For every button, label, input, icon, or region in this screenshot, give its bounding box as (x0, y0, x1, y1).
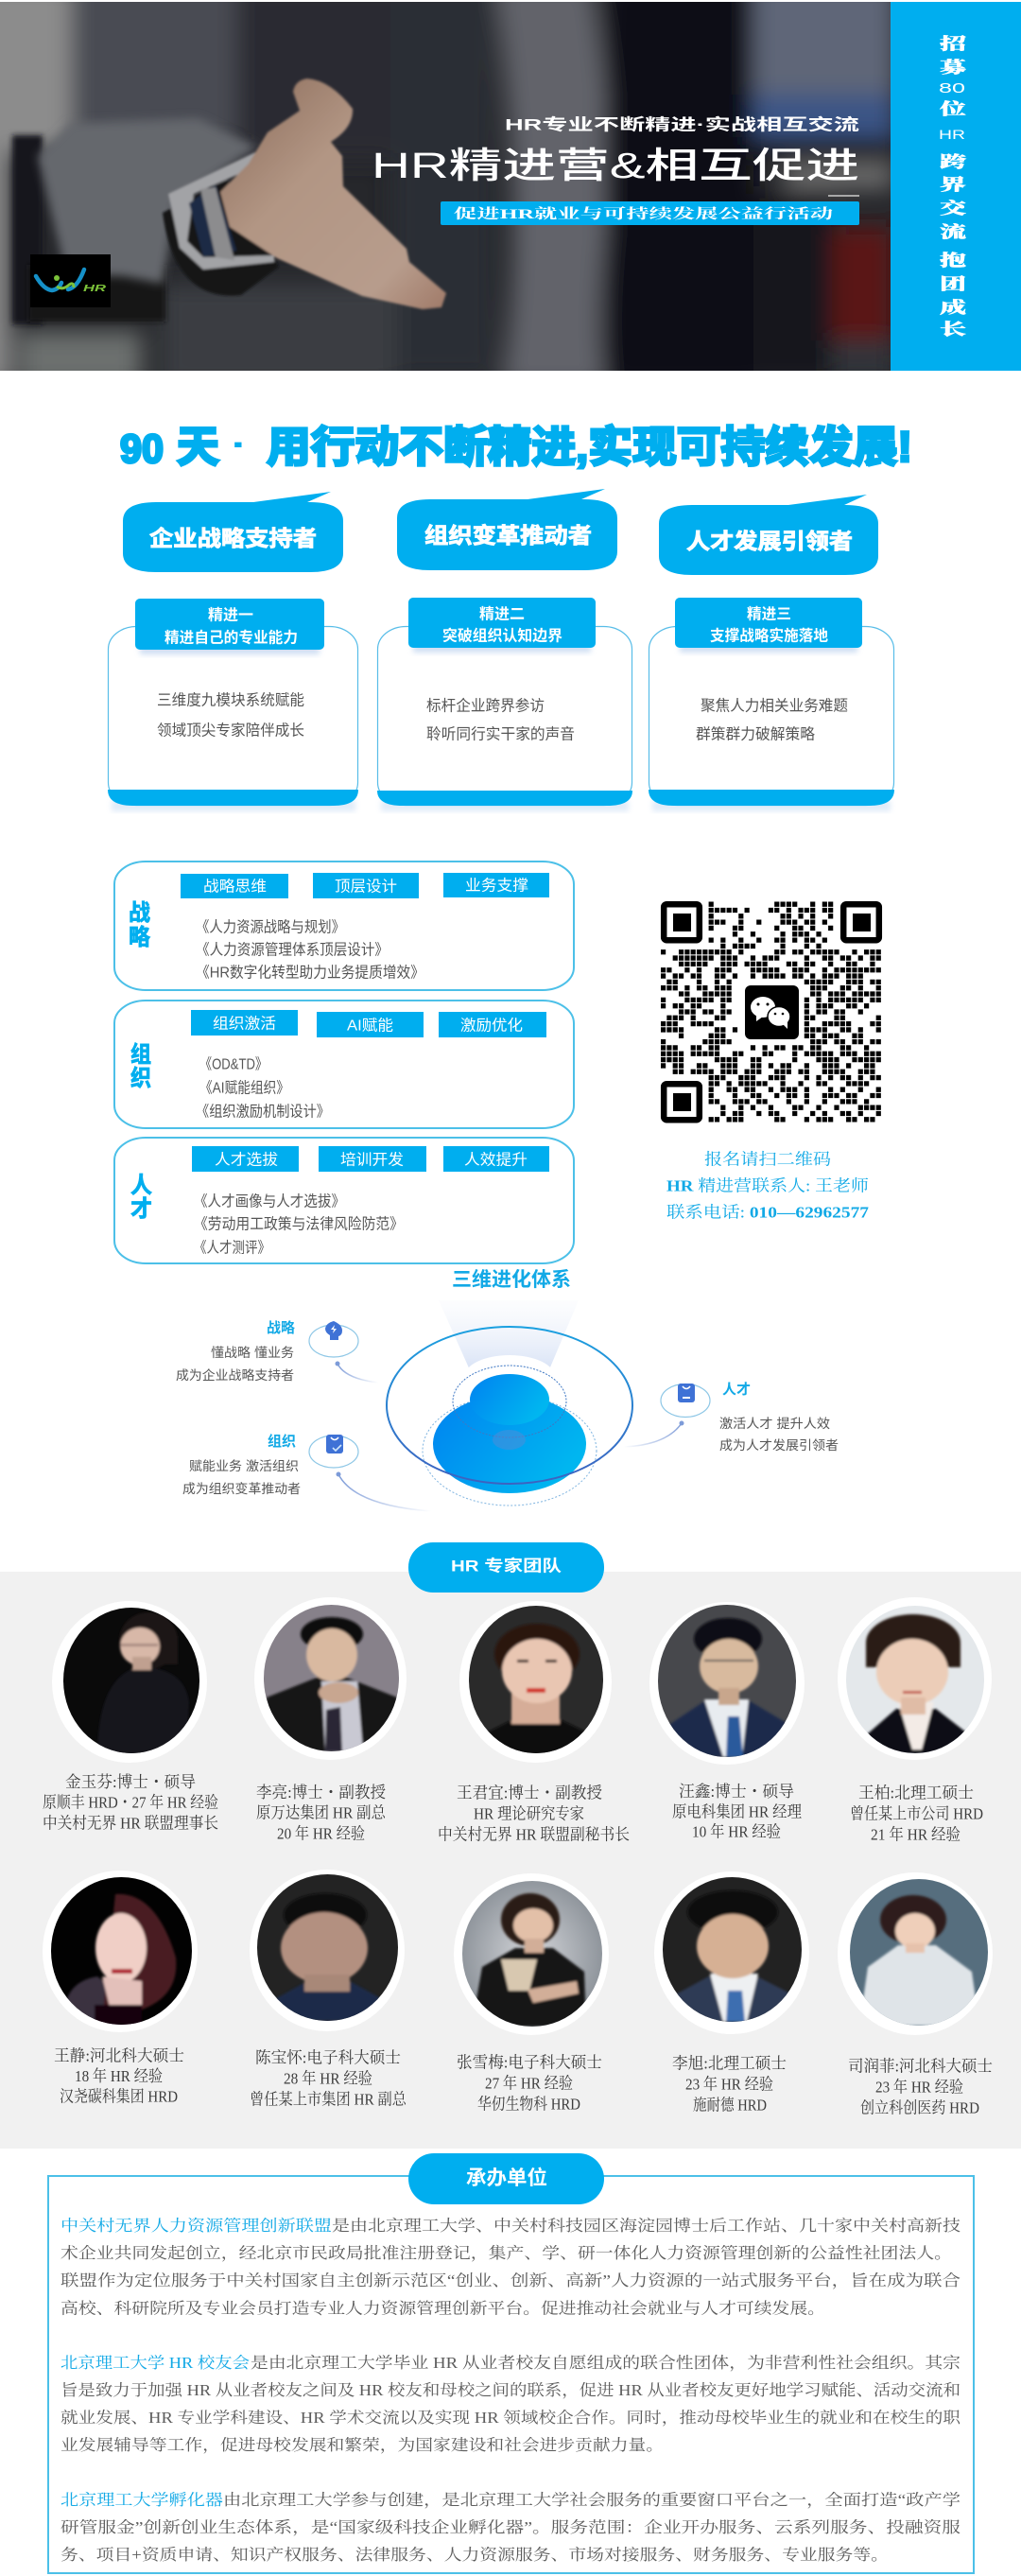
caption: 李亮:博士・副教授 (256, 1784, 386, 1801)
course list: 《人力资源管理体系顶层设计》 (196, 942, 389, 959)
caption: 王静:河北科大硕士 (54, 2046, 184, 2065)
hero banner (0, 0, 1021, 388)
tags: 顶层设计 (335, 878, 397, 895)
caption: 张雪梅:电子科大硕士 (457, 2054, 602, 2071)
card: advance three: 聚焦人力相关业务难题 (701, 698, 848, 715)
tags: 组织激活 (213, 1016, 276, 1033)
panel: host organisations (48, 2153, 974, 2573)
course list: 《人力资源战略与规划》 (196, 919, 345, 936)
vertical label (130, 1042, 151, 1091)
QR code (661, 904, 882, 1120)
tags: 激励优化 (460, 1018, 523, 1035)
speech bubble: enterprise strategy: 企业战略支持者 (149, 526, 317, 550)
icon: lightbulb head (325, 1321, 342, 1340)
caption (438, 1784, 630, 1844)
caption: 28 年 HR 经验 (284, 2069, 372, 2088)
caption: 中关村无界 HR 联盟副秘书长 (438, 1825, 630, 1844)
logo (30, 254, 111, 307)
paragraph: BIT incubator (61, 2491, 961, 2564)
portrait (63, 1608, 199, 1753)
tags: 培训开发 (340, 1152, 404, 1169)
caption: 10 年 HR 经验 (692, 1821, 781, 1840)
registration contact text: HR 精进营联系人: 王老师 (666, 1176, 869, 1195)
caption: 原万达集团 HR 副总 (256, 1804, 387, 1821)
recruitment side panel (891, 2, 1021, 371)
icon: badge with check (326, 1435, 343, 1453)
tags: AI赋能 (347, 1018, 393, 1035)
card: advance two (377, 598, 632, 811)
main heading: 用行动不断精进,实现可持续发展! (267, 423, 912, 471)
card: advance two: 聆听同行实干家的声音 (426, 726, 575, 743)
paragraph: Zhongguancun alliance (61, 2217, 961, 2317)
tags: 人才选拔 (215, 1152, 278, 1169)
portrait (264, 1605, 399, 1751)
caption: 23 年 HR 经验 (685, 2075, 773, 2094)
paragraph: BIT HR alumni association: 旨是致力于加强 HR 从业者校友之间及 HR 校友和母校之间的联系，促进 HR 从业者校友更好地学习赋能、活动交流和 (61, 2381, 960, 2399)
course list: 《OD&TD》 (199, 1057, 268, 1072)
paragraph: BIT incubator: 北京理工大学孵化器 (61, 2491, 224, 2509)
hero photo: handshake (0, 0, 895, 388)
caption: 王柏:北理工硕士 (858, 1784, 974, 1802)
expert: Li Xu (654, 1871, 809, 2115)
caption (54, 2046, 184, 2105)
registration contact text: 联系电话: 010—62962577 (666, 1203, 870, 1222)
paragraph: BIT HR alumni association: 就业发展、HR 专业学科建设、HR 学术交流以及实现 HR 领域校企合作。同时，推动母校毕业生的就业和在校生的职 (61, 2409, 961, 2427)
caption: 金玉芬:博士・硕导 (65, 1773, 196, 1791)
tab: 精进自己的专业能力 (164, 628, 298, 647)
callout: organisation: 赋能业务 激活组织 (189, 1459, 299, 1473)
callout: talent: 激活人才 提升人效 (719, 1417, 831, 1431)
paragraph: Zhongguancun alliance: 高校、科研院所及专业会员打造专业人力资源管理创新平台。促进推动社会就业与人才可续发展。 (61, 2300, 825, 2317)
tags (192, 1146, 549, 1172)
paragraph: Zhongguancun alliance: 是由北京理工大学、中关村科技园区海淀园博士后工作站、几十家中关村高新技 (332, 2217, 961, 2235)
caption (457, 2054, 602, 2113)
tab (135, 599, 324, 650)
card: advance one: 领域顶尖专家陪伴成长 (157, 722, 304, 740)
expert: Chen Baohuai (250, 1868, 407, 2109)
course list: 《劳动用工政策与法律风险防范》 (194, 1216, 404, 1233)
callout: strategy: 成为企业战略支持者 (176, 1367, 294, 1383)
main heading: 90 (120, 426, 164, 472)
tab: 突破组织认知边界 (442, 626, 562, 645)
hero subtitle: HR专业不断精进·实战相互交流 (505, 115, 859, 134)
tab: 精进一 (208, 605, 253, 624)
caption: 李旭:北理工硕士 (672, 2054, 787, 2073)
vertical label: 人 (130, 1173, 152, 1198)
vertical label: 才 (130, 1196, 152, 1222)
expert: Si Runfei (838, 1872, 997, 2116)
heading pill: HR expert team: HR 专家团队 (451, 1557, 562, 1575)
three-dimension diagram title: 三维进化体系 (452, 1269, 571, 1291)
heading pill: host units: 承办单位 (466, 2167, 547, 2189)
card: advance two: 标杆企业跨界参访 (426, 698, 545, 715)
recruitment side panel: 位 (940, 99, 966, 118)
expert: Wang Jing (43, 1871, 199, 2105)
vertical label: 略 (129, 925, 150, 950)
caption (672, 2054, 787, 2115)
speech bubble: organisation change: 组织变革推动者 (424, 523, 592, 548)
tab: 精进三 (747, 605, 791, 622)
recruitment side panel: 80 (939, 80, 965, 96)
expert: Jin Yufen (43, 1601, 218, 1833)
caption: 21 年 HR 经验 (871, 1825, 960, 1844)
icon: wechat (745, 985, 799, 1039)
caption: 23 年 HR 经验 (875, 2077, 963, 2096)
vertical label: 织 (130, 1066, 151, 1091)
recruitment side panel: 跨 (940, 153, 966, 171)
recruitment side panel: HR (939, 127, 965, 142)
hero tagline bar: 促进HR就业与可持续发展公益行活动 (454, 205, 834, 222)
icon: device (678, 1384, 695, 1402)
course list: 《HR数字化转型助力业务提质增效》 (196, 965, 424, 982)
hero title: HR精进营&相互促进 (372, 147, 859, 186)
callout: talent: 人才 (722, 1382, 751, 1398)
portrait (257, 1874, 398, 2021)
logo: HR (83, 284, 107, 294)
vertical label (129, 900, 150, 950)
recruitment side panel: 交 (940, 200, 968, 218)
caption: 18 年 HR 经验 (75, 2066, 163, 2085)
card: advance one: 三维度九模块系统赋能 (157, 692, 304, 709)
recruitment side panel: 流 (940, 222, 968, 241)
caption: 陈宝怀:电子科大硕士 (255, 2048, 401, 2067)
caption: 原顺丰 HRD・27 年 HR 经验 (43, 1793, 218, 1812)
caption (848, 2058, 993, 2116)
vertical label: 组 (130, 1042, 151, 1068)
registration contact text: 报名请扫二维码 (704, 1150, 831, 1169)
tags: 人效提升 (464, 1152, 528, 1169)
tab: 精进二 (479, 605, 525, 622)
heading pill: HR expert team (408, 1542, 604, 1593)
recruitment side panel: 抱 (940, 251, 966, 270)
caption: 创立科创医药 HRD (860, 2099, 979, 2116)
portrait (658, 1605, 796, 1757)
recruitment side panel: 长 (940, 320, 966, 339)
paragraph: BIT HR alumni association: 业发展辅导等工作，促进母校发展和繁荣，为国家建设和社会进步贡献力量。 (61, 2436, 664, 2454)
tags (181, 873, 549, 898)
speech bubble: talent development: 人才发展引领者 (686, 529, 853, 553)
paragraph: Zhongguancun alliance: 中关村无界人力资源管理创新联盟 (61, 2217, 332, 2235)
caption: 20 年 HR 经验 (277, 1823, 365, 1842)
expert: Li Liang (254, 1597, 407, 1842)
caption: 汉尧碳科集团 HRD (60, 2088, 178, 2105)
card: advance three: 群策群力破解策略 (696, 726, 815, 743)
recruitment side panel: 招 (940, 34, 966, 53)
paragraph: BIT HR alumni association (61, 2354, 961, 2454)
heading pill: host units (408, 2153, 604, 2204)
caption (256, 1784, 387, 1842)
registration contact text (666, 1150, 870, 1222)
caption: 曾任某上市公司 HRD (850, 1804, 983, 1823)
speech bubble: enterprise strategy (123, 492, 343, 572)
tags: 业务支撑 (465, 878, 528, 895)
course list: 《人才测评》 (194, 1239, 270, 1256)
caption (43, 1773, 218, 1833)
speech bubble: talent development (659, 495, 878, 575)
panel: strategy (114, 862, 574, 990)
portrait (846, 1606, 984, 1753)
paragraph: BIT HR alumni association: 是由北京理工大学毕业 HR 从业者校友自愿组成的联合性团体，为非营利性社会组织。其宗 (251, 2354, 961, 2372)
course list: 《AI赋能组织》 (199, 1080, 289, 1097)
callout: talent: 成为人才发展引领者 (719, 1438, 839, 1453)
paragraph: Zhongguancun alliance: 联盟作为定位服务于中关村国家自主创新示范区“创业、创新、高新”人力资源的一站式服务平台，旨在成为联合 (61, 2271, 960, 2289)
dark chair shape (12, 135, 43, 324)
course list: 《人才画像与人才选拔》 (194, 1193, 345, 1210)
expert: Zhang Xuemei (454, 1873, 609, 2113)
portrait (462, 1881, 602, 2027)
expert: Wang Bai (838, 1597, 993, 1844)
paragraph: BIT incubator: 研管服金”创新创业生态体系，是“国家级科技企业孵化器”。服务范围：企业开办服务、云系列服务、投融资服 (61, 2518, 961, 2536)
course list: 《组织激励机制设计》 (196, 1103, 330, 1120)
caption: 汪鑫:博士・硕导 (679, 1783, 794, 1801)
caption: 原电科集团 HR 经理 (672, 1802, 802, 1821)
tab (408, 598, 596, 648)
portrait (850, 1879, 988, 2026)
paragraph: BIT HR alumni association: 北京理工大学 HR 校友会 (61, 2354, 250, 2372)
caption: 王君宜:博士・副教授 (457, 1784, 602, 1802)
speech bubble: organisation change (397, 489, 617, 570)
caption: HR 理论研究专家 (474, 1804, 584, 1823)
paragraph: BIT incubator: 务、项目+资质申请、知识产权服务、法律服务、人力资源服务、市场对接服务、财务服务、专业服务等。 (61, 2546, 889, 2564)
paragraph: BIT incubator: 由北京理工大学参与创建，是北京理工大学社会服务的重要窗口平台之一，全面打造“政产学 (223, 2491, 960, 2509)
caption (250, 2048, 407, 2109)
recruitment side panel: 成 (940, 298, 966, 317)
card: advance one (108, 599, 358, 811)
panel: organisation (114, 1001, 574, 1128)
tab: 支撑战略实施落地 (710, 626, 828, 645)
vertical label: 战 (129, 900, 150, 926)
course list (196, 919, 424, 982)
recruitment side panel: 募 (940, 58, 966, 77)
expert: Wang Xin (649, 1598, 805, 1840)
paragraph: Zhongguancun alliance: 术企业共同发起创立，经北京市民政局批准注册登记，集产、学、研一体化人力资源管理创新的公益性社团法人。 (61, 2244, 952, 2262)
vertical label (130, 1173, 152, 1222)
portrait (51, 1877, 192, 2025)
caption (850, 1784, 983, 1844)
panel: talent (114, 1138, 574, 1263)
callout: strategy: 懂战略 懂业务 (211, 1346, 294, 1360)
tags: 战略思维 (203, 878, 267, 895)
caption: 中关村无界 HR 联盟理事长 (43, 1814, 218, 1833)
expert: Wang Junyi (438, 1601, 630, 1844)
caption: 曾任某上市集团 HR 副总 (250, 2090, 407, 2109)
diagram: three-dimensional evolution (387, 1300, 632, 1506)
callout: strategy: 战略 (267, 1319, 295, 1336)
caption (672, 1783, 802, 1840)
hero tagline bar (441, 201, 859, 225)
tab (675, 598, 862, 648)
callout: talent (624, 1382, 839, 1453)
tags (191, 1010, 546, 1037)
callout: organisation: 组织 (268, 1434, 296, 1450)
caption: 27 年 HR 经验 (485, 2073, 573, 2092)
caption: 华仞生物科 HRD (477, 2096, 580, 2113)
portrait (469, 1606, 603, 1753)
main heading: · (233, 429, 246, 461)
course list (196, 1057, 330, 1120)
recruitment side panel: 团 (940, 275, 966, 293)
portrait (663, 1877, 802, 2022)
caption: 司润菲:河北科大硕士 (848, 2058, 993, 2075)
callout: organisation: 成为组织变革推动者 (182, 1482, 301, 1496)
recruitment side panel: 界 (940, 175, 966, 194)
callout: strategy (176, 1319, 378, 1383)
caption: 施耐德 HRD (693, 2096, 767, 2115)
main heading: 天 (177, 423, 219, 471)
card: advance three (649, 598, 894, 811)
course list (194, 1193, 404, 1256)
panel: expert team background (0, 1572, 1021, 2149)
callout: organisation (182, 1434, 431, 1511)
